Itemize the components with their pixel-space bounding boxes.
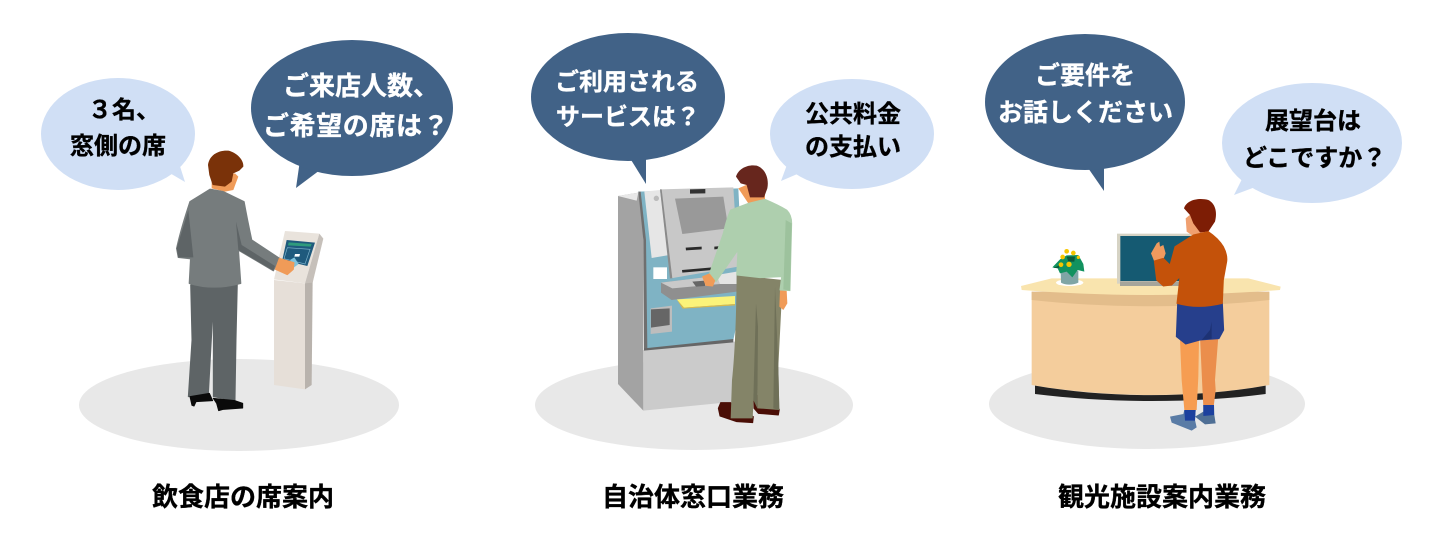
kiosk (274, 231, 323, 389)
ground ellipse: municipal (535, 360, 853, 450)
visitor: neck (1186, 213, 1205, 235)
woman: heels (190, 393, 243, 411)
speech bubble: ご利用されるサービスは？: サービスは？ (556, 104, 700, 131)
speech bubble: 展望台はどこですか？: 展望台は (1265, 108, 1361, 135)
speech bubble: ご来店人数、ご希望の席は？: ご希望の席は？ (263, 111, 449, 141)
woman: neck and face (212, 173, 238, 192)
visitor: hand (1151, 242, 1166, 262)
ground ellipse: restaurant (79, 359, 399, 451)
laptop (1117, 234, 1194, 286)
speech bubble: ご要件をお話しください (985, 34, 1185, 191)
man: shoes (718, 395, 779, 423)
visitor: front leg (1180, 340, 1199, 410)
woman: legs (188, 283, 237, 401)
caption: 観光施設案内業務: 観光施設案内業務 (1058, 482, 1266, 512)
speech bubble: 3名、窓側の席 (41, 78, 195, 190)
ground ellipse: tourism (989, 359, 1305, 449)
scene: municipal kiosk machine and man (618, 165, 792, 423)
woman: jacket (177, 189, 279, 287)
visitor: back leg (1200, 337, 1218, 407)
man: legs (731, 275, 783, 418)
speech bubble: 公共料金の支払い: の支払い (805, 134, 901, 161)
visitor: hair (1184, 199, 1216, 232)
man: shirt (709, 199, 792, 291)
speech bubble: 展望台はどこですか？: どこですか？ (1243, 145, 1386, 172)
machine body (618, 193, 643, 411)
speech bubble: ご利用されるサービスは？: ご利用される (555, 68, 699, 96)
speech bubble: ご来店人数、ご希望の席は？: ご来店人数、 (283, 71, 439, 101)
counter top (1021, 278, 1281, 295)
counter base (1035, 386, 1266, 401)
scene: restaurant kiosk and guest (177, 151, 323, 411)
speech bubble: ご要件をお話しください: お話しください (998, 99, 1173, 127)
visitor: shorts (1176, 303, 1224, 344)
caption: 自治体窓口業務: 自治体窓口業務 (602, 482, 784, 512)
visitor: socks and shoes (1195, 405, 1216, 424)
woman: hand (275, 258, 294, 275)
speech bubble: ご要件をお話しください: ご要件を (1035, 61, 1135, 90)
scene: tourism counter and visitor (1021, 199, 1281, 431)
plant (1052, 249, 1084, 286)
counter shade (1032, 292, 1269, 306)
man: right hand (779, 290, 787, 310)
speech bubble: 3名、窓側の席: 窓側の席 (70, 133, 166, 160)
man: hair (736, 165, 768, 197)
speech bubble: 公共料金の支払い (770, 79, 934, 189)
man: neck (738, 183, 765, 203)
visitor: sweater (1154, 232, 1227, 306)
speech bubble: 展望台はどこですか？ (1222, 83, 1402, 203)
speech bubble: 3名、窓側の席: ３名、 (88, 97, 160, 124)
counter front (1032, 292, 1269, 395)
speech bubble: 公共料金の支払い: 公共料金 (805, 101, 901, 128)
speech bubble: ご利用されるサービスは？ (531, 33, 725, 184)
man: left hand (703, 274, 715, 286)
caption: 飲食店の席案内: 飲食店の席案内 (152, 482, 334, 512)
woman: hair (208, 151, 243, 187)
speech bubble: ご来店人数、ご希望の席は？ (251, 40, 453, 188)
